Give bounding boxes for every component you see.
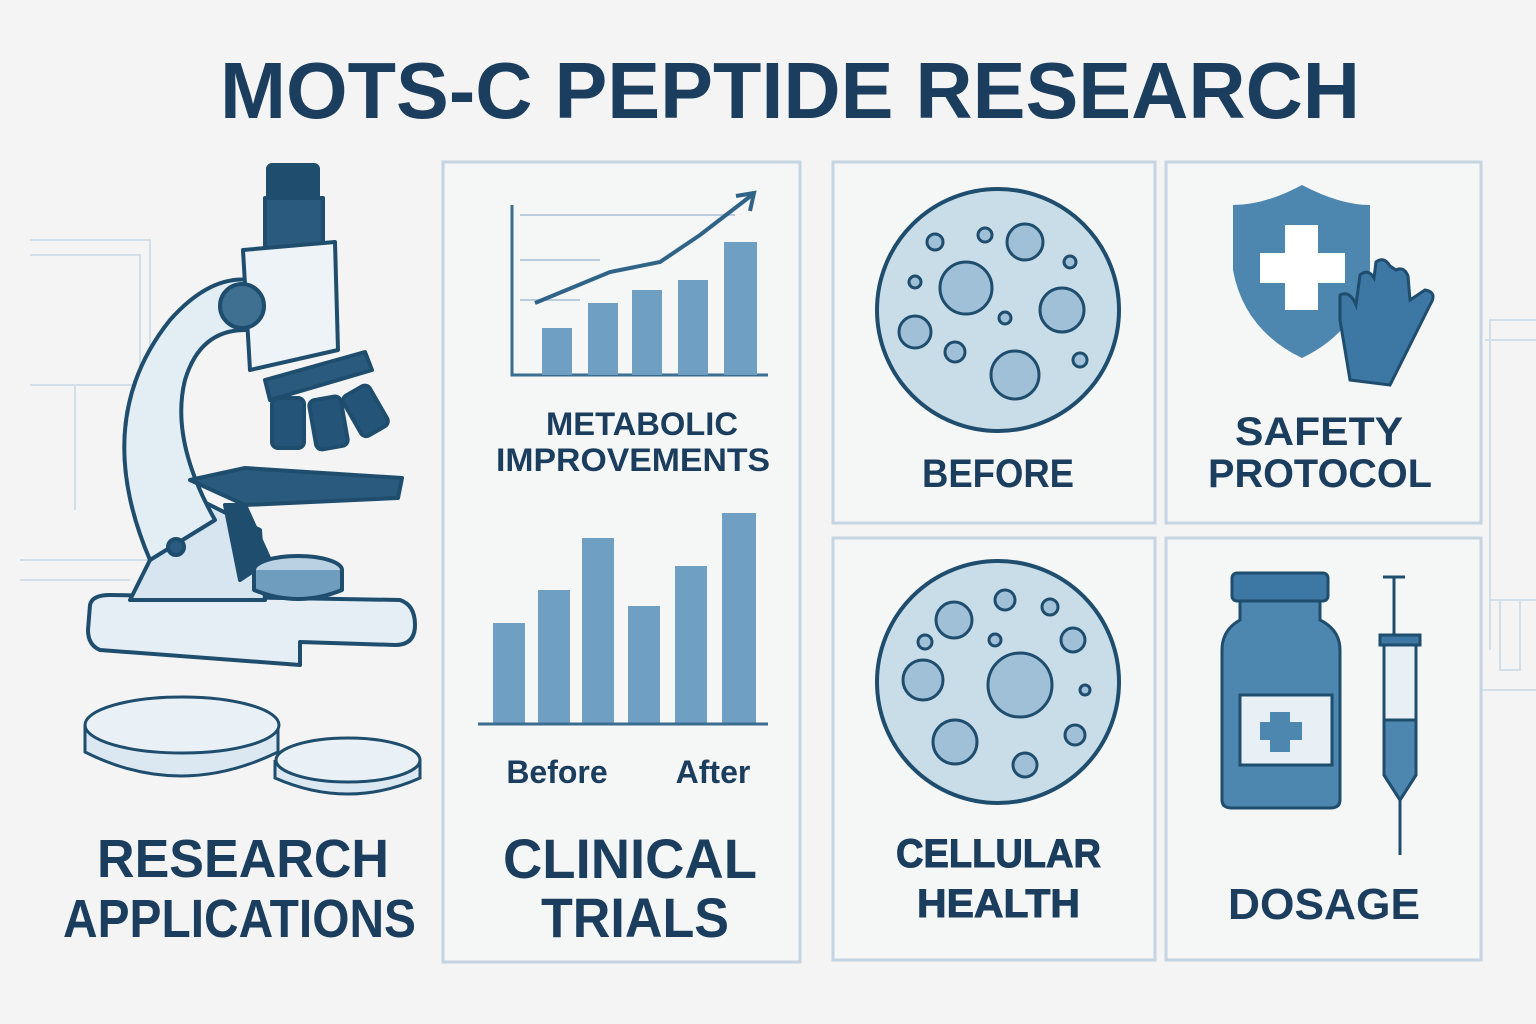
text: cellular health: CELLULAR [896,832,1101,876]
chart: before/after bars: After [676,754,750,790]
panel: cellular health [833,538,1155,960]
text: cellular health: HEALTH [917,882,1080,926]
title: MOTS-C PEPTIDE RESEARCH [220,46,1360,135]
text: clinical trials: TRIALS [541,886,729,949]
text: safety protocol: PROTOCOL [1208,452,1432,496]
icon: shield [1233,185,1370,358]
text: safety protocol [1208,410,1432,496]
text: before: BEFORE [922,452,1074,496]
text: research applications: RESEARCH [97,829,389,889]
icon: microscope [88,165,415,665]
text: clinical trials: CLINICAL [503,827,757,890]
chart: before/after bars: Before [506,754,608,790]
text: dosage: DOSAGE [1228,880,1420,929]
icon: cells after [877,561,1119,803]
icon: petri dishes [85,697,420,794]
icon: syringe [1380,577,1420,855]
text: research applications: APPLICATIONS [63,889,416,949]
chart: metabolic line + bars [512,193,768,375]
chart: before/after bars [478,513,768,790]
text: research applications [63,829,416,949]
text: metabolic improvements [496,406,770,478]
text: safety protocol: SAFETY [1235,410,1403,454]
panel: before [833,162,1155,523]
text: metabolic improvements: IMPROVEMENTS [496,442,770,478]
background lab sketch [20,240,1536,690]
panel: safety protocol [1166,162,1481,523]
icon: glove [1340,260,1433,385]
text: metabolic improvements: METABOLIC [546,406,738,442]
text: cellular health [896,832,1101,926]
icon: cells before [877,189,1119,431]
panel: clinical trials [443,162,800,962]
panel: dosage [1166,538,1481,960]
icon: vial [1222,573,1340,808]
text: clinical trials [503,827,757,949]
